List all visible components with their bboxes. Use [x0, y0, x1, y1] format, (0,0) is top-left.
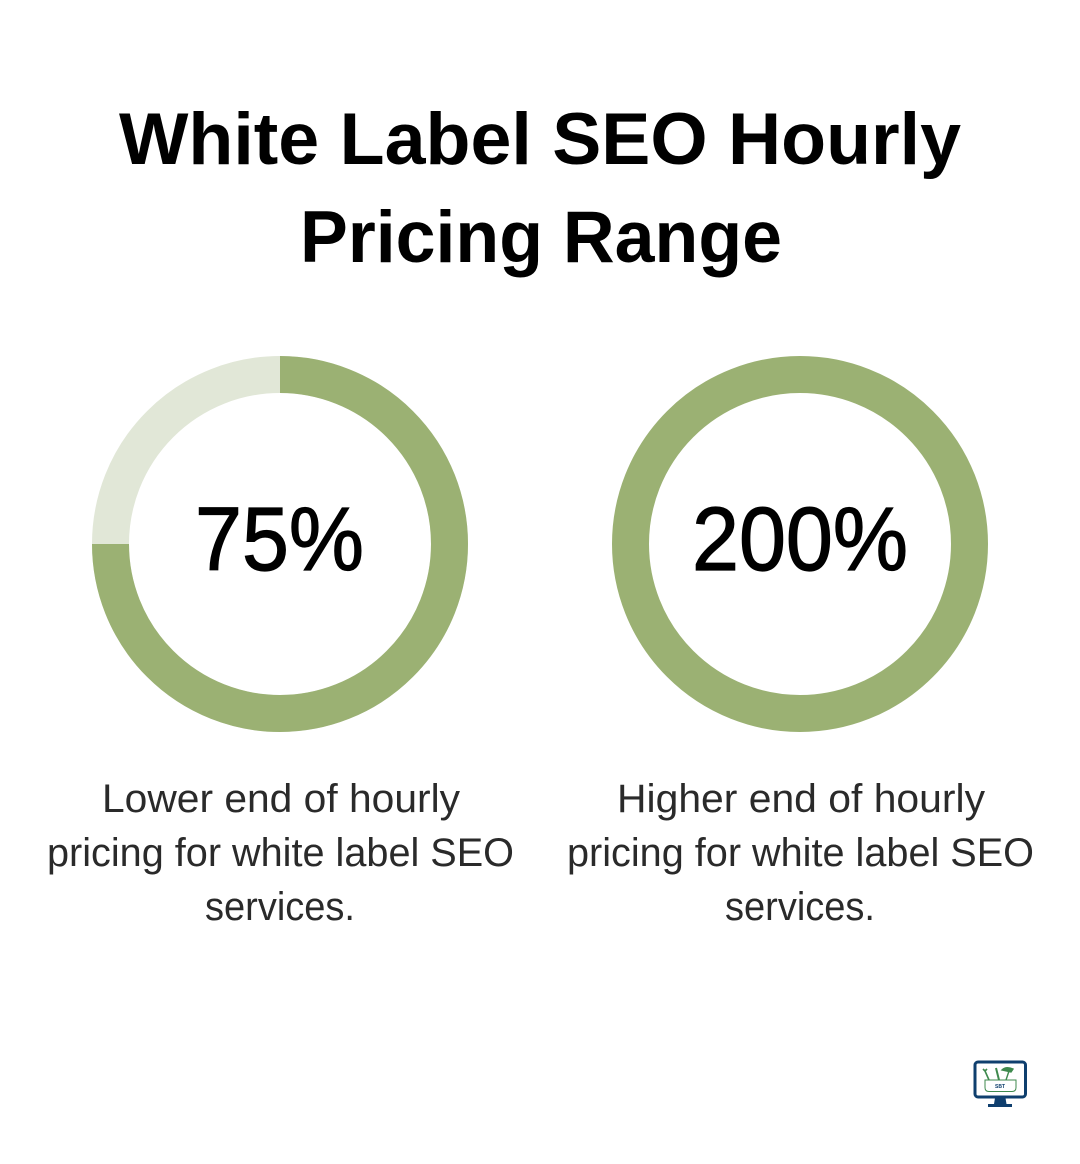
caption: higher end: Higher end of hourly: [617, 777, 985, 821]
title: Pricing Range: [300, 197, 782, 278]
icon: SBT logo monitor with toolbox: [975, 1062, 1026, 1107]
caption: higher end: services.: [725, 885, 875, 929]
caption: lower end: pricing for white label SEO: [47, 831, 514, 875]
icon: SBT logo monitor with toolbox: SBT: [995, 1084, 1005, 1090]
caption: higher end: [567, 777, 1034, 929]
title: [119, 99, 961, 278]
donut chart: 200%: [630, 374, 970, 714]
title: White Label SEO Hourly: [119, 99, 961, 180]
donut chart: 75%: [110, 374, 450, 714]
value: 200%: 200%: [692, 490, 908, 590]
panel: lower end stat: [47, 374, 514, 929]
caption: lower end: Lower end of hourly: [102, 777, 460, 821]
caption: lower end: [47, 777, 514, 929]
caption: higher end: pricing for white label SEO: [567, 831, 1034, 875]
value: 75%: 75%: [195, 490, 364, 590]
caption: lower end: services.: [205, 885, 355, 929]
panel: higher end stat: [567, 374, 1034, 929]
